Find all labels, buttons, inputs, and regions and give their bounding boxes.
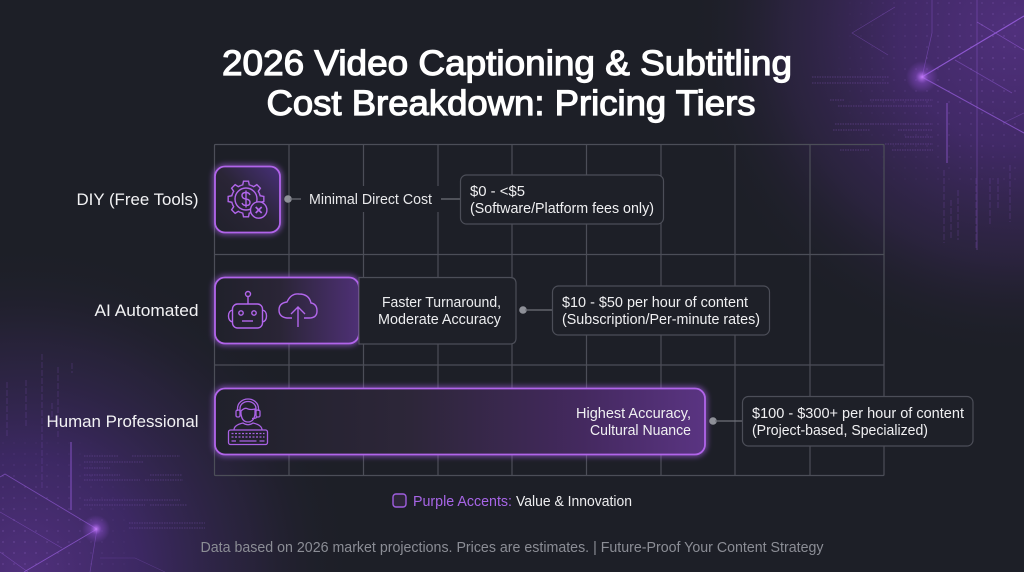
price callout: DIY: (Software/Platform fees only): [470, 201, 654, 217]
text: minimal direct cost: [305, 186, 441, 212]
row 3: Human: [215, 388, 973, 454]
title: [222, 43, 792, 123]
price callout: Human: $100 - $300+ per hour of content: [752, 406, 964, 422]
decoration: top-right tech network: [744, 0, 1024, 300]
icon: support agent with keyboard: [228, 399, 268, 444]
title: 2026 Video Captioning & Subtitling: [222, 43, 792, 83]
price callout: Human: [742, 396, 973, 446]
icon: gear with dollar and cancel mark: [228, 181, 267, 218]
bar: AI: [215, 278, 359, 344]
label box: AI: Moderate Accuracy: [378, 312, 502, 328]
row labels: [46, 190, 198, 431]
icon: robot: [228, 292, 266, 328]
price callout: AI: (Subscription/Per-minute rates): [562, 312, 760, 328]
bar: DIY: [215, 166, 280, 232]
label box: AI: Faster Turnaround,: [382, 295, 501, 311]
price callout: AI: $10 - $50 per hour of content: [562, 295, 748, 311]
chart grid: [214, 144, 884, 476]
connector: DIY to label: [284, 195, 301, 203]
row labels: AI Automated: [94, 301, 198, 320]
footer note: Data based on 2026 market projections. Prices are estimates. | Future-Proof Your Content Strategy: [200, 540, 824, 556]
label box: AI: [359, 278, 516, 344]
legend: [393, 494, 632, 510]
connector: Human: [709, 417, 742, 425]
row 1: DIY: [215, 166, 664, 232]
connector: AI: [519, 306, 552, 314]
price callout: DIY: $0 - <$5: [470, 184, 525, 200]
decoration: bottom-left tech network: [0, 308, 288, 572]
price callout: DIY: [460, 175, 664, 224]
row labels: Human Professional: [46, 412, 198, 431]
price callout: Human: (Project-based, Specialized): [752, 423, 928, 439]
row labels: DIY (Free Tools): [76, 190, 198, 209]
icon: cloud upload: [279, 294, 317, 327]
row 2: AI: [215, 278, 770, 344]
price callout: AI: [552, 286, 770, 335]
text: highest accuracy: Highest Accuracy,: [576, 406, 691, 422]
legend: Value & Innovation: [516, 494, 632, 510]
bar: Human: [215, 388, 705, 454]
legend: Purple Accents:: [413, 494, 512, 510]
text: minimal direct cost: Minimal Direct Cost: [309, 192, 432, 208]
text: cultural nuance: Cultural Nuance: [590, 423, 691, 439]
title: Cost Breakdown: Pricing Tiers: [266, 83, 756, 123]
